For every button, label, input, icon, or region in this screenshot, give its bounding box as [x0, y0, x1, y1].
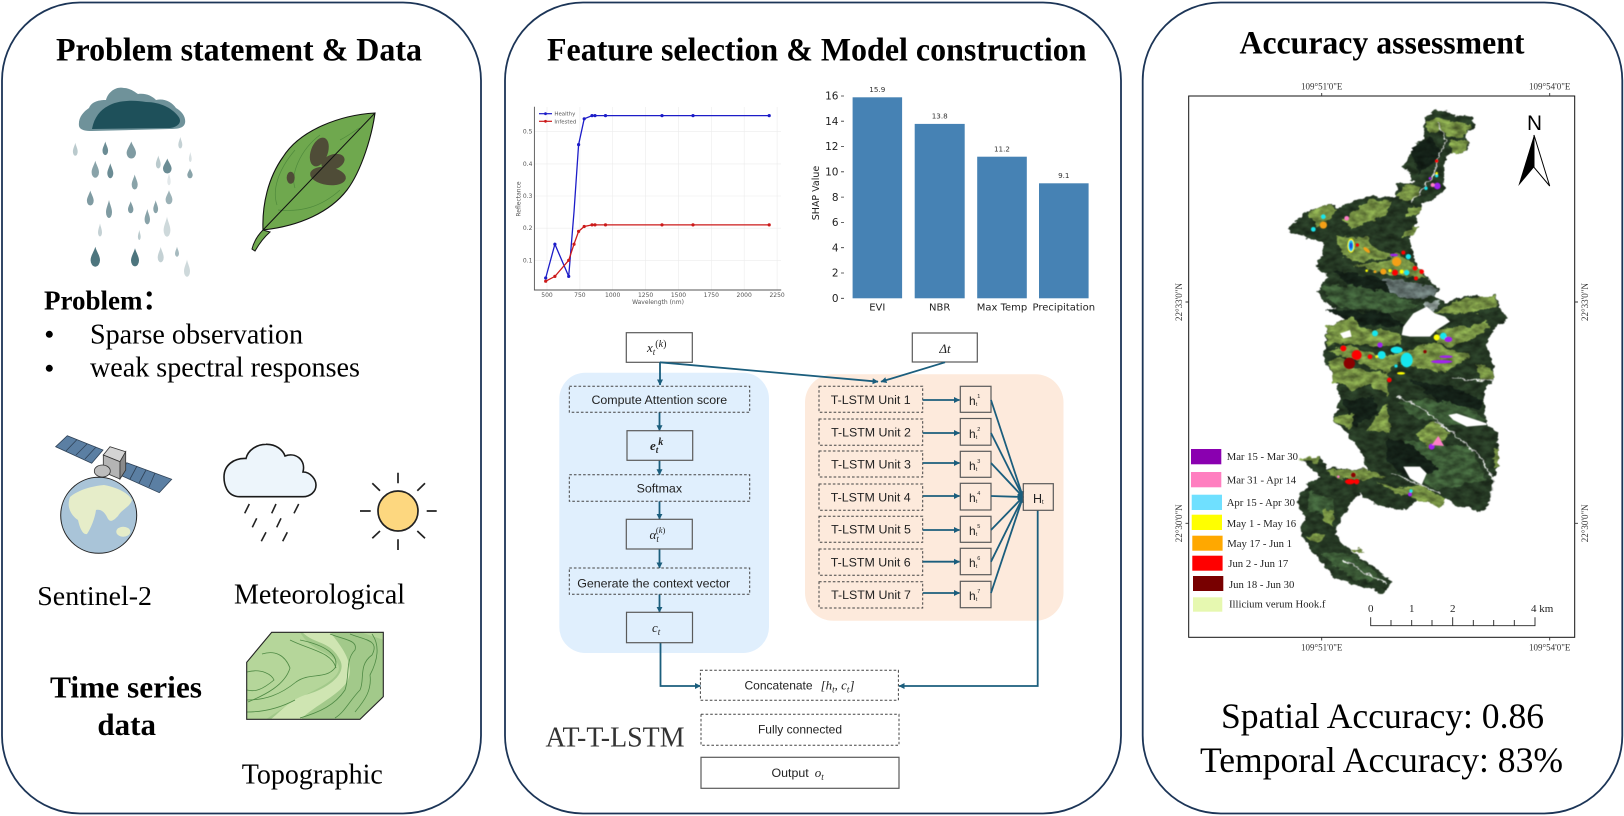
box: alpha: t [656, 534, 659, 544]
chart: reflectance line chart [515, 107, 785, 306]
map: 22°33'0"N [1174, 283, 1184, 321]
box: e: e [650, 438, 656, 453]
text: problem list: Sparse observation [90, 319, 303, 350]
group: T-LSTM units: T-LSTM Unit 2 [831, 426, 911, 440]
group: T-LSTM units: T-LSTM Unit 4 [831, 491, 911, 505]
box: e: t [656, 445, 659, 455]
box: compute attention score: Compute Attention score [591, 393, 727, 407]
chart: SHAP value bar chart: Precipitation [1033, 303, 1095, 314]
chart: SHAP value bar chart: 6 [832, 217, 839, 229]
arrows: units to hidden states [923, 400, 960, 593]
box: H: H [1033, 492, 1042, 506]
chart: reflectance line chart: 500 [541, 292, 553, 299]
chart: reflectance line chart: Reflectance [515, 181, 522, 217]
chart: SHAP value bar chart: 10 [825, 166, 838, 178]
chart: reflectance line chart: Infested [554, 119, 576, 125]
icon: sun [360, 473, 437, 550]
map legend: Illicium verum Hook.f [1229, 598, 1326, 610]
map scale bar: 2 [1450, 603, 1455, 615]
text: spatial accuracy: Spatial Accuracy: 0.86 [1221, 696, 1544, 736]
box: output [701, 757, 899, 788]
group: hidden state boxes: h [969, 491, 976, 505]
chart: reflectance line chart: 0.5 [523, 129, 533, 136]
chart: reflectance line chart: 2250 [769, 292, 785, 299]
box: H: t [1042, 500, 1044, 506]
group: hidden state boxes: h [969, 427, 976, 441]
heading: accuracy assessment: Accuracy assessment [1240, 26, 1524, 62]
chart: SHAP value bar chart: 9.1 [1058, 171, 1070, 180]
map: 22°30'0"N [1580, 504, 1590, 542]
panel: T-LSTM branch background [805, 374, 1064, 621]
label: Meteorological: Meteorological [234, 579, 405, 610]
chart: SHAP value bar chart: 15.9 [869, 85, 886, 94]
group: hidden state boxes: 5 [977, 524, 980, 530]
box: alpha [626, 519, 692, 549]
box: input x: ( [655, 339, 659, 350]
icon: meteorological cloud and rain [224, 444, 316, 541]
chart: SHAP value bar chart: NBR [929, 303, 950, 314]
panel: problem statement and data [2, 2, 481, 814]
map legend: Mar 15 - Mar 30 [1227, 451, 1298, 463]
box: compute attention score [569, 386, 750, 412]
group: hidden state boxes: h [969, 524, 976, 538]
icon: rain cloud [73, 88, 193, 277]
icon: infected leaf [252, 113, 375, 251]
chart: SHAP value bar chart: 0 [832, 293, 838, 305]
map legend [1191, 449, 1326, 612]
group: hidden state boxes: h [969, 394, 976, 408]
map: 109°51'0"E [1301, 642, 1343, 652]
group: T-LSTM units: T-LSTM Unit 3 [831, 458, 911, 472]
box: softmax [569, 475, 750, 501]
chart: reflectance line chart: 0.4 [523, 161, 533, 168]
chart: reflectance line chart: Healthy [554, 112, 576, 118]
chart: SHAP value bar chart: 8 [832, 192, 838, 204]
box: alpha: α [650, 527, 656, 542]
panel: accuracy assessment [1143, 2, 1622, 814]
heading: problem statement: Problem statement & Data [56, 32, 422, 68]
chart: reflectance line chart: Wavelength (nm) [632, 299, 684, 306]
chart: reflectance line chart: 0.1 [523, 257, 533, 264]
map: 109°51'0"E [1301, 82, 1343, 92]
chart: SHAP value bar chart: Max Temp [977, 303, 1027, 314]
box: output: t [821, 772, 824, 782]
chart: SHAP value bar chart [811, 85, 1095, 314]
box: input x [626, 333, 692, 362]
icon: north arrow [1518, 112, 1550, 186]
map: 22°33'0"N [1580, 283, 1590, 321]
chart: SHAP value bar chart: 13.8 [932, 112, 948, 120]
group: hidden state boxes: t [976, 435, 978, 441]
chart: SHAP value bar chart: SHAP Value [811, 166, 822, 220]
map scale bar: 1 [1409, 603, 1414, 615]
box: delta t [912, 333, 977, 362]
text: problem list [46, 319, 360, 384]
group: hidden state boxes: t [976, 467, 978, 473]
box: input x: t [653, 347, 656, 357]
group: hidden state boxes: 4 [977, 491, 980, 497]
box: H [1023, 484, 1053, 510]
box: concatenate: t [847, 684, 850, 694]
panel: attention branch background [559, 373, 769, 653]
group: hidden state boxes: 7 [977, 589, 980, 595]
map scale bar: 0 [1368, 603, 1374, 615]
box: fully connected: Fully connected [758, 722, 842, 736]
icon: satellite and earth [56, 436, 172, 553]
group: hidden state boxes: t [976, 597, 978, 603]
chart: SHAP value bar chart: 16 [825, 91, 839, 103]
group: T-LSTM units: T-LSTM Unit 5 [831, 522, 911, 536]
chart: reflectance line chart: 1000 [605, 292, 621, 299]
arrows: attention flow [660, 362, 1038, 686]
text: problem heading: Problem： [44, 285, 169, 315]
box: e [627, 431, 693, 460]
box: c: c [652, 620, 658, 635]
box: concatenate: t [832, 684, 835, 694]
map legend: Jun 18 - Jun 30 [1229, 579, 1294, 591]
map legend: Mar 31 - Apr 14 [1227, 474, 1297, 486]
arrows: hidden states to H [991, 400, 1023, 593]
map: 22°30'0"N [1174, 504, 1184, 542]
map scale bar: 4 km [1531, 603, 1554, 615]
chart: reflectance line chart: 1500 [671, 292, 686, 299]
group: hidden state boxes: t [976, 564, 978, 570]
box: input x: x [647, 340, 653, 355]
text: time series data: Time series [50, 669, 202, 704]
text: temporal accuracy: Temporal Accuracy: 83% [1200, 740, 1563, 780]
map [1174, 82, 1590, 652]
chart: SHAP value bar chart: 4 [832, 242, 839, 254]
map: 109°54'0"E [1529, 642, 1571, 652]
map legend: May 17 - Jun 1 [1227, 538, 1292, 550]
box: concatenate: Concatenate [h [744, 678, 832, 692]
chart: SHAP value bar chart: 12 [825, 141, 838, 153]
map legend: May 1 - May 16 [1227, 518, 1297, 530]
group: hidden state boxes: h [969, 589, 976, 603]
chart: reflectance line chart: 0.2 [523, 225, 533, 232]
box: c: t [658, 627, 661, 637]
icon: topographic map [247, 632, 384, 720]
box: softmax: Softmax [637, 481, 683, 495]
chart: SHAP value bar chart: 2 [832, 268, 838, 280]
box: e: k [658, 437, 663, 448]
label: Topographic: Topographic [242, 759, 383, 790]
map scale bar [1368, 603, 1554, 626]
label: Sentinel-2: Sentinel-2 [37, 581, 152, 612]
group: hidden state boxes: 1 [977, 394, 980, 400]
icon: north arrow: N [1527, 112, 1542, 135]
map: 109°54'0"E [1529, 82, 1571, 92]
chart: reflectance line chart: 0.3 [523, 193, 533, 200]
text: time series data [50, 669, 202, 742]
group: hidden state boxes: t [976, 402, 978, 408]
box: alpha: k) [659, 525, 665, 535]
group: T-LSTM units: T-LSTM Unit 7 [831, 588, 911, 602]
group: hidden state boxes: 2 [977, 427, 980, 433]
text: time series data: data [97, 707, 156, 742]
box: generate the context vector: Generate the context vector [577, 576, 730, 590]
panel: feature selection and model construction [505, 2, 1121, 814]
chart: SHAP value bar chart: 14 [825, 116, 839, 128]
box: delta t: Δt [938, 341, 951, 356]
group: hidden state boxes: h [969, 459, 976, 473]
group: hidden state boxes [960, 386, 991, 608]
group: hidden state boxes: 3 [977, 459, 980, 465]
map legend: Apr 15 - Apr 30 [1227, 497, 1295, 509]
chart: reflectance line chart: 1250 [638, 292, 653, 299]
box: fully connected [701, 714, 899, 745]
group: T-LSTM units: T-LSTM Unit 6 [831, 556, 911, 570]
chart: SHAP value bar chart: EVI [869, 303, 885, 314]
chart: reflectance line chart: 2000 [737, 292, 752, 299]
chart: reflectance line chart: 750 [574, 292, 586, 299]
box: output: Output o [772, 765, 821, 780]
group: T-LSTM units: T-LSTM Unit 1 [831, 393, 911, 407]
group: hidden state boxes: 6 [977, 556, 980, 562]
group: hidden state boxes: t [976, 532, 978, 538]
box: generate the context vector [569, 568, 750, 594]
group: hidden state boxes: h [969, 556, 976, 570]
label: AT-T-LSTM: AT-T-LSTM [546, 723, 685, 754]
map legend: Jun 2 - Jun 17 [1228, 558, 1289, 570]
chart: SHAP value bar chart: 11.2 [994, 144, 1010, 154]
box: concatenate: ] [848, 678, 854, 692]
group: hidden state boxes: t [976, 499, 978, 505]
chart: reflectance line chart: 1750 [704, 292, 719, 299]
box: concatenate [700, 670, 898, 700]
box: input x: k) [659, 339, 666, 350]
heading: feature selection: Feature selection & Model construction [547, 32, 1086, 68]
box: alpha: ( [656, 525, 659, 535]
box: concatenate: , c [835, 678, 847, 692]
map: study area image [1287, 108, 1508, 593]
text: problem list: weak spectral responses [90, 353, 360, 384]
group: T-LSTM units [819, 386, 923, 608]
box: c [626, 612, 692, 643]
